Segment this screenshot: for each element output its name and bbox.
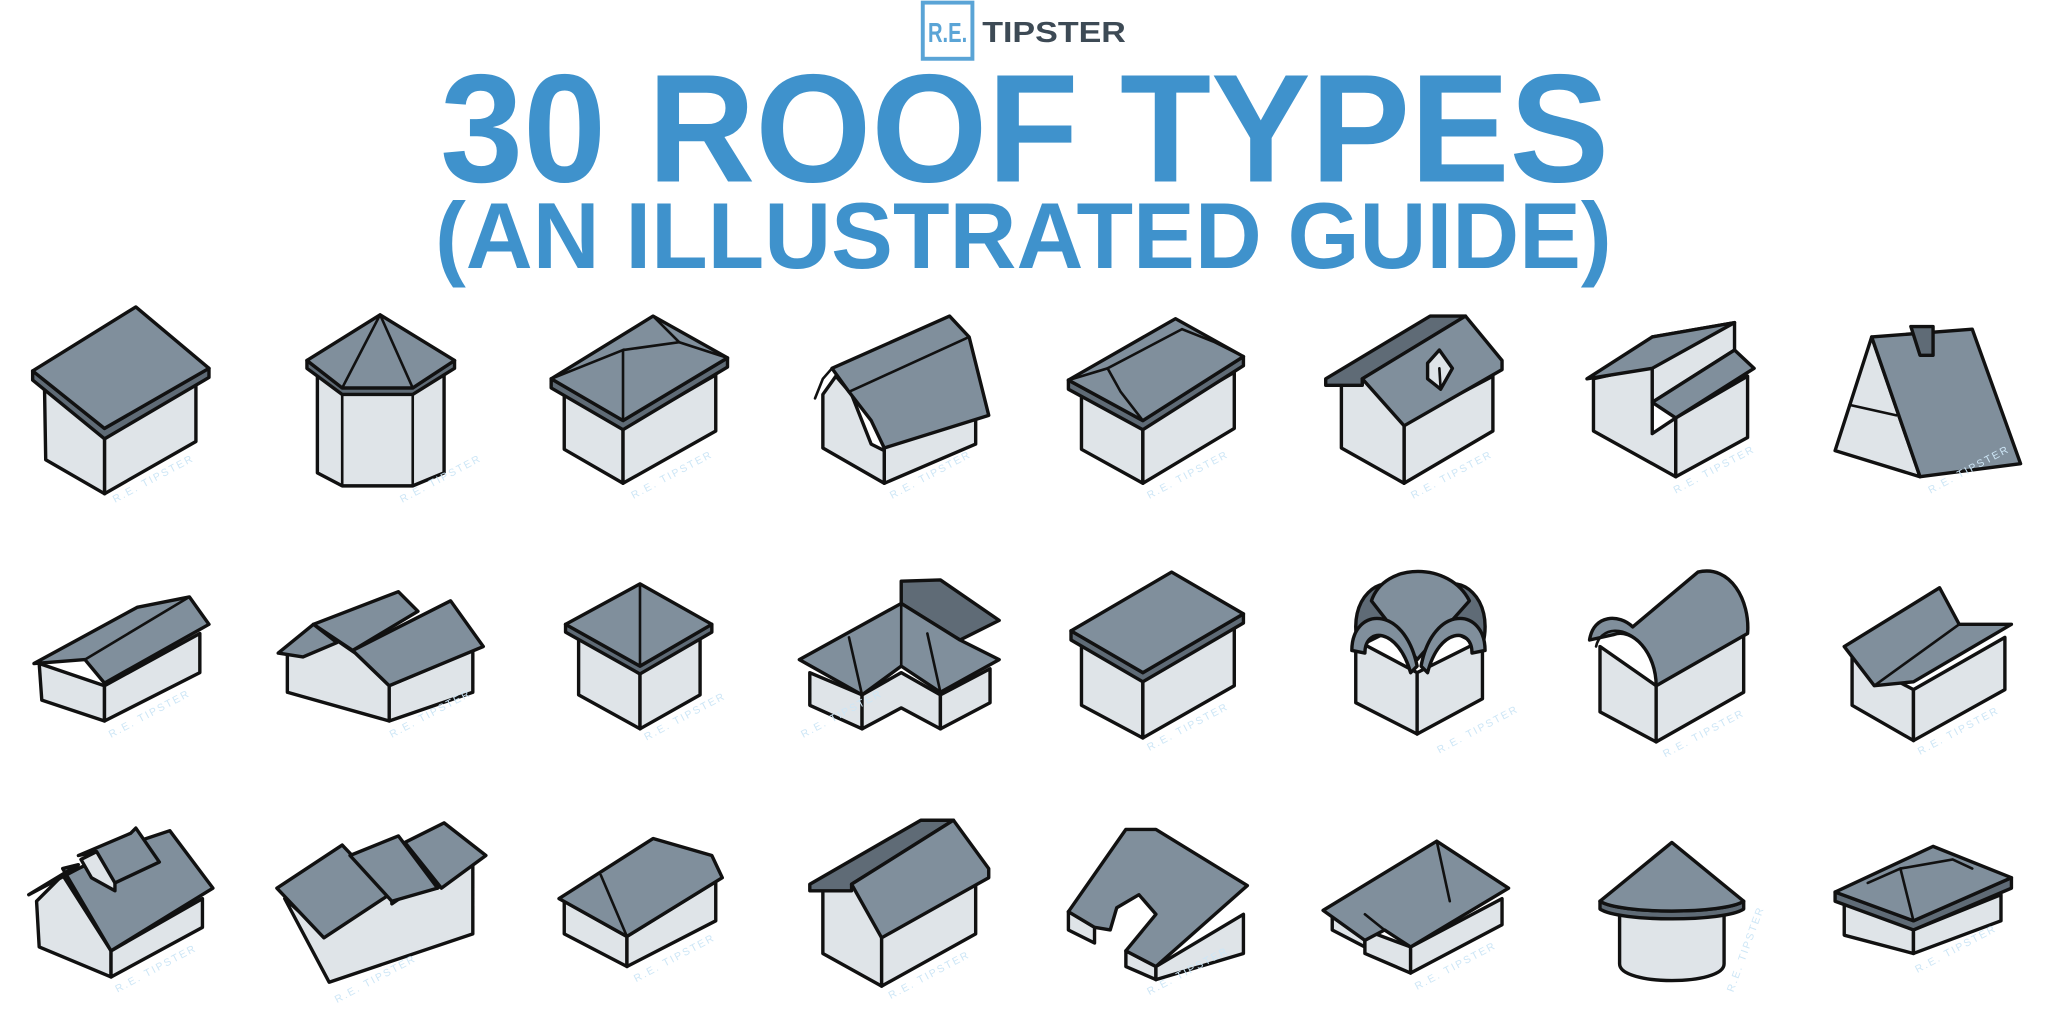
house 23: conical: R.E. TIPSTER — [1726, 905, 1767, 994]
logo: TIPSTER — [982, 17, 1126, 49]
house 15: barrel — [1590, 571, 1748, 760]
house 17: gable with shed dormer: R.E. TIPSTER — [114, 943, 199, 995]
house 3: hip — [551, 316, 728, 502]
house 24: low hip — [1835, 846, 2011, 976]
house 3: hip: R.E. TIPSTER — [630, 449, 715, 502]
title: 30 ROOF TYPES — [440, 42, 1609, 215]
house 20: front gable — [810, 820, 989, 1002]
house 24: low hip: R.E. TIPSTER — [1914, 923, 1999, 976]
house 11: pyramid hip: R.E. TIPSTER — [643, 691, 728, 743]
house 7: skillion / split: R.E. TIPSTER — [1672, 444, 1757, 496]
house 13: flat: R.E. TIPSTER — [1146, 701, 1231, 754]
house 12: cross hip — [799, 580, 999, 741]
house 19: hip gable: R.E. TIPSTER — [632, 933, 717, 985]
title — [435, 42, 1612, 288]
house 9: cross gable: R.E. TIPSTER — [107, 688, 192, 741]
house 5: dutch gable — [1068, 319, 1243, 502]
house 14: dome: R.E. TIPSTER — [1436, 704, 1521, 756]
house 22: L hip — [1323, 841, 1509, 993]
house 1: gable — [33, 307, 209, 506]
house 2: pyramid octagon — [307, 315, 484, 506]
logo: R.E. — [928, 17, 967, 48]
house 8: A-frame — [1835, 327, 2021, 496]
house 6: gable with dormer — [1326, 316, 1502, 502]
house 18: sawtooth — [277, 823, 486, 1006]
house 2: pyramid octagon: R.E. TIPSTER — [399, 453, 484, 506]
house 5: dutch gable: R.E. TIPSTER — [1146, 449, 1231, 502]
house 10: M-shaped — [278, 592, 483, 741]
house 21: U-shaped: R.E. TIPSTER — [1146, 946, 1231, 998]
house 18: sawtooth: R.E. TIPSTER — [333, 953, 418, 1006]
house 22: L hip: R.E. TIPSTER — [1413, 940, 1499, 993]
house 12: cross hip: R.E. TIPSTER — [800, 688, 885, 741]
house 4: gambrel: R.E. TIPSTER — [888, 449, 973, 502]
house 10: M-shaped: R.E. TIPSTER — [388, 688, 473, 741]
house 16: saltbox — [1844, 588, 2011, 758]
house 1: gable: R.E. TIPSTER — [111, 453, 196, 506]
house 6: gable with dormer: R.E. TIPSTER — [1409, 449, 1495, 502]
house 4: gambrel — [815, 316, 989, 502]
logo — [923, 3, 1126, 59]
house 19: hip gable — [559, 839, 722, 985]
house 8: A-frame: R.E. TIPSTER — [1927, 444, 2012, 496]
house 9: cross gable — [34, 597, 209, 741]
house 23: conical — [1600, 842, 1767, 994]
house 16: saltbox: R.E. TIPSTER — [1916, 705, 2001, 758]
house 14: dome — [1352, 571, 1521, 756]
house 13: flat — [1071, 572, 1243, 754]
house 15: barrel: R.E. TIPSTER — [1662, 708, 1747, 760]
house 7: skillion / split — [1587, 323, 1757, 496]
house 21: U-shaped — [1068, 829, 1247, 998]
subtitle: (AN ILLUSTRATED GUIDE) — [435, 183, 1612, 288]
house 20: front gable: R.E. TIPSTER — [887, 950, 972, 1002]
house 11: pyramid hip — [566, 584, 728, 743]
house 17: gable with shed dormer — [29, 828, 213, 995]
